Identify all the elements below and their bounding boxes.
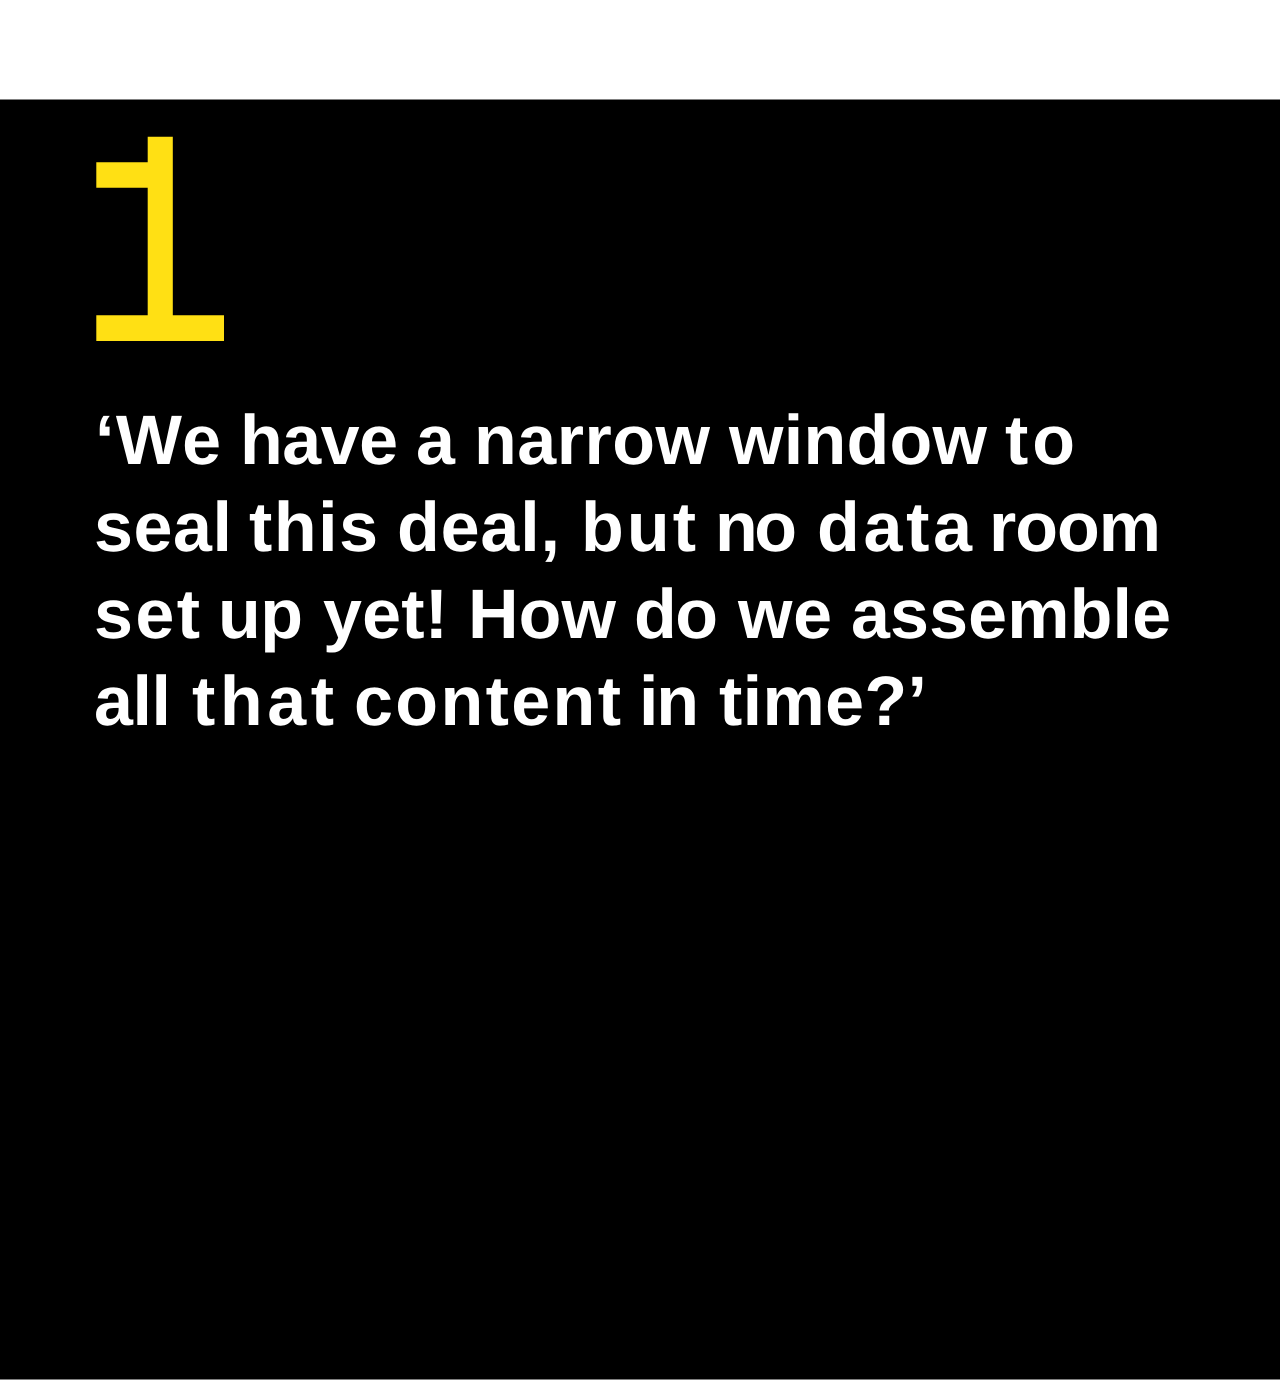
quote line 4: in: [639, 662, 699, 740]
quote line 2: data: [817, 488, 973, 566]
quote line 3: do: [634, 575, 718, 653]
quote line 3: assemble: [851, 575, 1171, 653]
quote text: [94, 401, 1171, 740]
quote line 2: [94, 488, 1161, 566]
quote line 4: [94, 662, 927, 740]
quote line 2: no: [715, 488, 797, 566]
quote line 1: narrow: [474, 401, 711, 479]
quote line 1: to: [1005, 401, 1075, 479]
quote line 4: all: [94, 662, 171, 740]
quote line 4: that: [192, 662, 334, 740]
quote line 1: [95, 401, 1075, 479]
quote line 3: we: [737, 575, 832, 653]
quote line 2: deal,: [397, 488, 560, 566]
quote line 2: but: [581, 488, 696, 566]
quote line 3: up: [218, 575, 303, 653]
quote line 1: have: [240, 401, 398, 479]
quote line 1: window: [728, 401, 988, 479]
quote line 4: content: [354, 662, 621, 740]
quote line 3: [94, 575, 1171, 653]
quote line 1: ‘We: [95, 401, 221, 479]
quote line 3: yet!: [323, 575, 448, 653]
quote line 2: this: [249, 488, 378, 566]
quote line 3: set: [94, 575, 200, 653]
quote line 4: time?’: [719, 662, 927, 740]
quote line 2: room: [989, 488, 1161, 566]
quote line 3: How: [468, 575, 617, 653]
quote line 2: seal: [94, 488, 232, 566]
icon: yellow numeral 1: [96, 137, 224, 341]
quote line 1: a: [416, 401, 456, 479]
